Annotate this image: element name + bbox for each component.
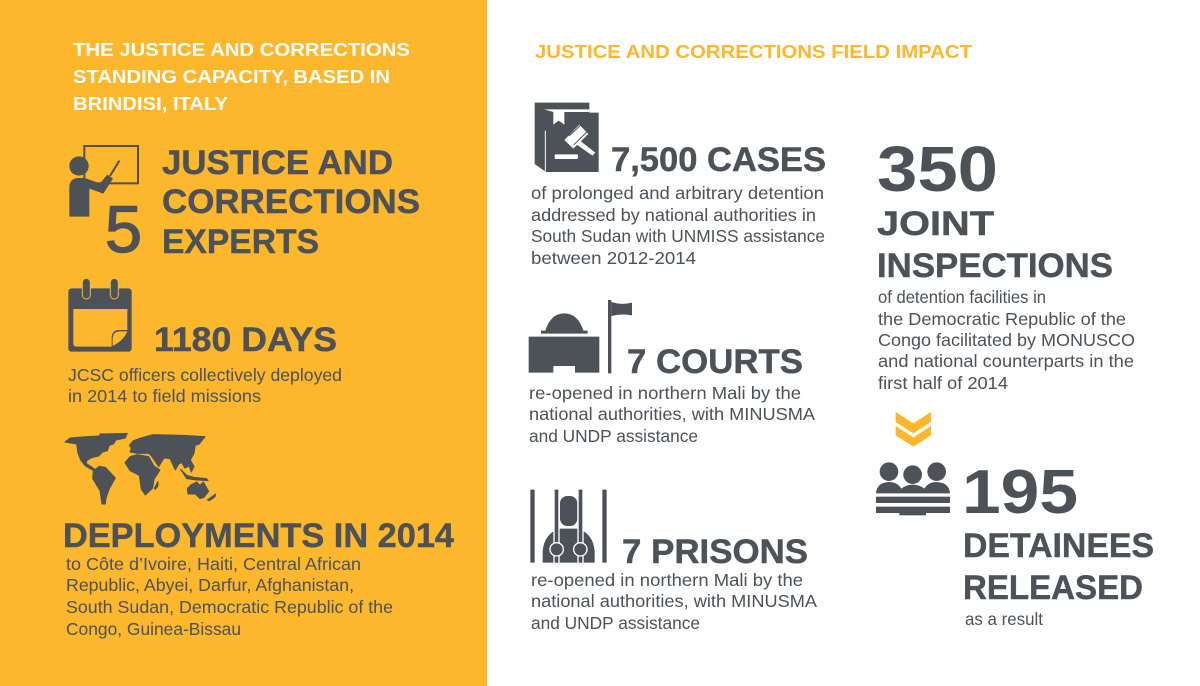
icon: group of detainees: [876, 462, 950, 515]
stat: 350 joint inspections: Congo facilitated by MONUSCO: [878, 330, 1135, 350]
stat: 350 joint inspections: [877, 133, 1135, 393]
stat: 7 prisons: [531, 533, 817, 633]
stat: 350 joint inspections: INSPECTIONS: [877, 247, 1113, 285]
icon: prisoner behind bars: [530, 489, 607, 563]
stat: 195 detainees released: [962, 458, 1154, 629]
stat: 7,500 cases: [531, 141, 826, 268]
stat: 7 courts: 7 COURTS: [627, 343, 803, 381]
stat: 350 joint inspections: and national counterparts in the: [878, 351, 1134, 371]
icon: law book and gavel: [535, 103, 599, 172]
stat: deployments in 2014: DEPLOYMENTS IN 2014: [63, 517, 454, 555]
stat: 7,500 cases: addressed by national authorities in: [531, 205, 816, 225]
title: standing capacity: THE JUSTICE AND CORRECTIONS: [73, 39, 410, 60]
panel: left yellow background: [0, 0, 487, 686]
stat: 1180 days: in 2014 to field missions: [68, 386, 261, 406]
stat: 195 detainees released: RELEASED: [963, 569, 1143, 607]
stat: deployments in 2014: South Sudan, Democratic Republic of the: [66, 597, 393, 617]
stat: deployments in 2014: to Côte d’Ivoire, Haiti, Central African: [66, 554, 361, 574]
stat: 5 experts: JUSTICE AND: [162, 144, 393, 182]
stat: 7 prisons: and UNDP assistance: [531, 613, 700, 633]
stat: 350 joint inspections: the Democratic Republic of the: [878, 309, 1126, 329]
stat: 7,500 cases: of prolonged and arbitrary detention: [531, 183, 824, 203]
stat: 5 experts: [105, 144, 420, 266]
stat: 7,500 cases: 7,500 CASES: [611, 141, 826, 179]
title: standing capacity: STANDING CAPACITY, BASED IN: [73, 66, 390, 87]
stat: deployments in 2014: Congo, Guinea-Bissau: [66, 619, 241, 639]
stat: 7 courts: [529, 343, 815, 446]
stat: 7 courts: national authorities, with MINUSMA: [529, 404, 815, 424]
stat: 350 joint inspections: 350: [877, 133, 998, 205]
icon: calendar: [68, 278, 132, 352]
stat: 7,500 cases: South Sudan with UNMISS assistance: [531, 226, 825, 246]
stat: 195 detainees released: DETAINEES: [963, 527, 1154, 565]
stat: 5 experts: EXPERTS: [162, 223, 319, 261]
stat: 350 joint inspections: JOINT: [877, 205, 994, 243]
icon: world map: [65, 433, 216, 504]
stat: 7,500 cases: between 2012-2014: [531, 248, 696, 268]
stat: 1180 days: [68, 321, 342, 406]
title: standing capacity: BRINDISI, ITALY: [73, 93, 229, 114]
stat: 1180 days: 1180 DAYS: [154, 321, 337, 359]
stat: 1180 days: JCSC officers collectively deployed: [68, 365, 342, 385]
stat: 7 prisons: national authorities, with MINUSMA: [531, 591, 817, 611]
arrow: double chevron: [896, 412, 931, 447]
stat: 5 experts: 5: [105, 192, 142, 266]
stat: 7 prisons: 7 PRISONS: [622, 533, 808, 571]
title: standing capacity: [73, 39, 410, 114]
icon: teacher at board: [69, 146, 138, 217]
stat: 350 joint inspections: first half of 2014: [878, 373, 1008, 393]
stat: deployments in 2014: Republic, Abyei, Darfur, Afghanistan,: [66, 575, 354, 595]
stat: 195 detainees released: 195: [962, 458, 1078, 527]
stat: 5 experts: CORRECTIONS: [162, 183, 420, 221]
stat: 7 courts: and UNDP assistance: [529, 426, 698, 446]
icon: courthouse with flag: [529, 300, 632, 373]
stat: deployments in 2014: [63, 517, 454, 639]
heading: field impact: JUSTICE AND CORRECTIONS FIELD IMPACT: [535, 41, 973, 62]
stat: 7 courts: re-opened in northern Mali by the: [529, 383, 801, 403]
stat: 195 detainees released: as a result: [965, 609, 1043, 629]
stat: 350 joint inspections: of detention facilities in: [878, 287, 1046, 307]
stat: 7 prisons: re-opened in northern Mali by the: [531, 570, 803, 590]
